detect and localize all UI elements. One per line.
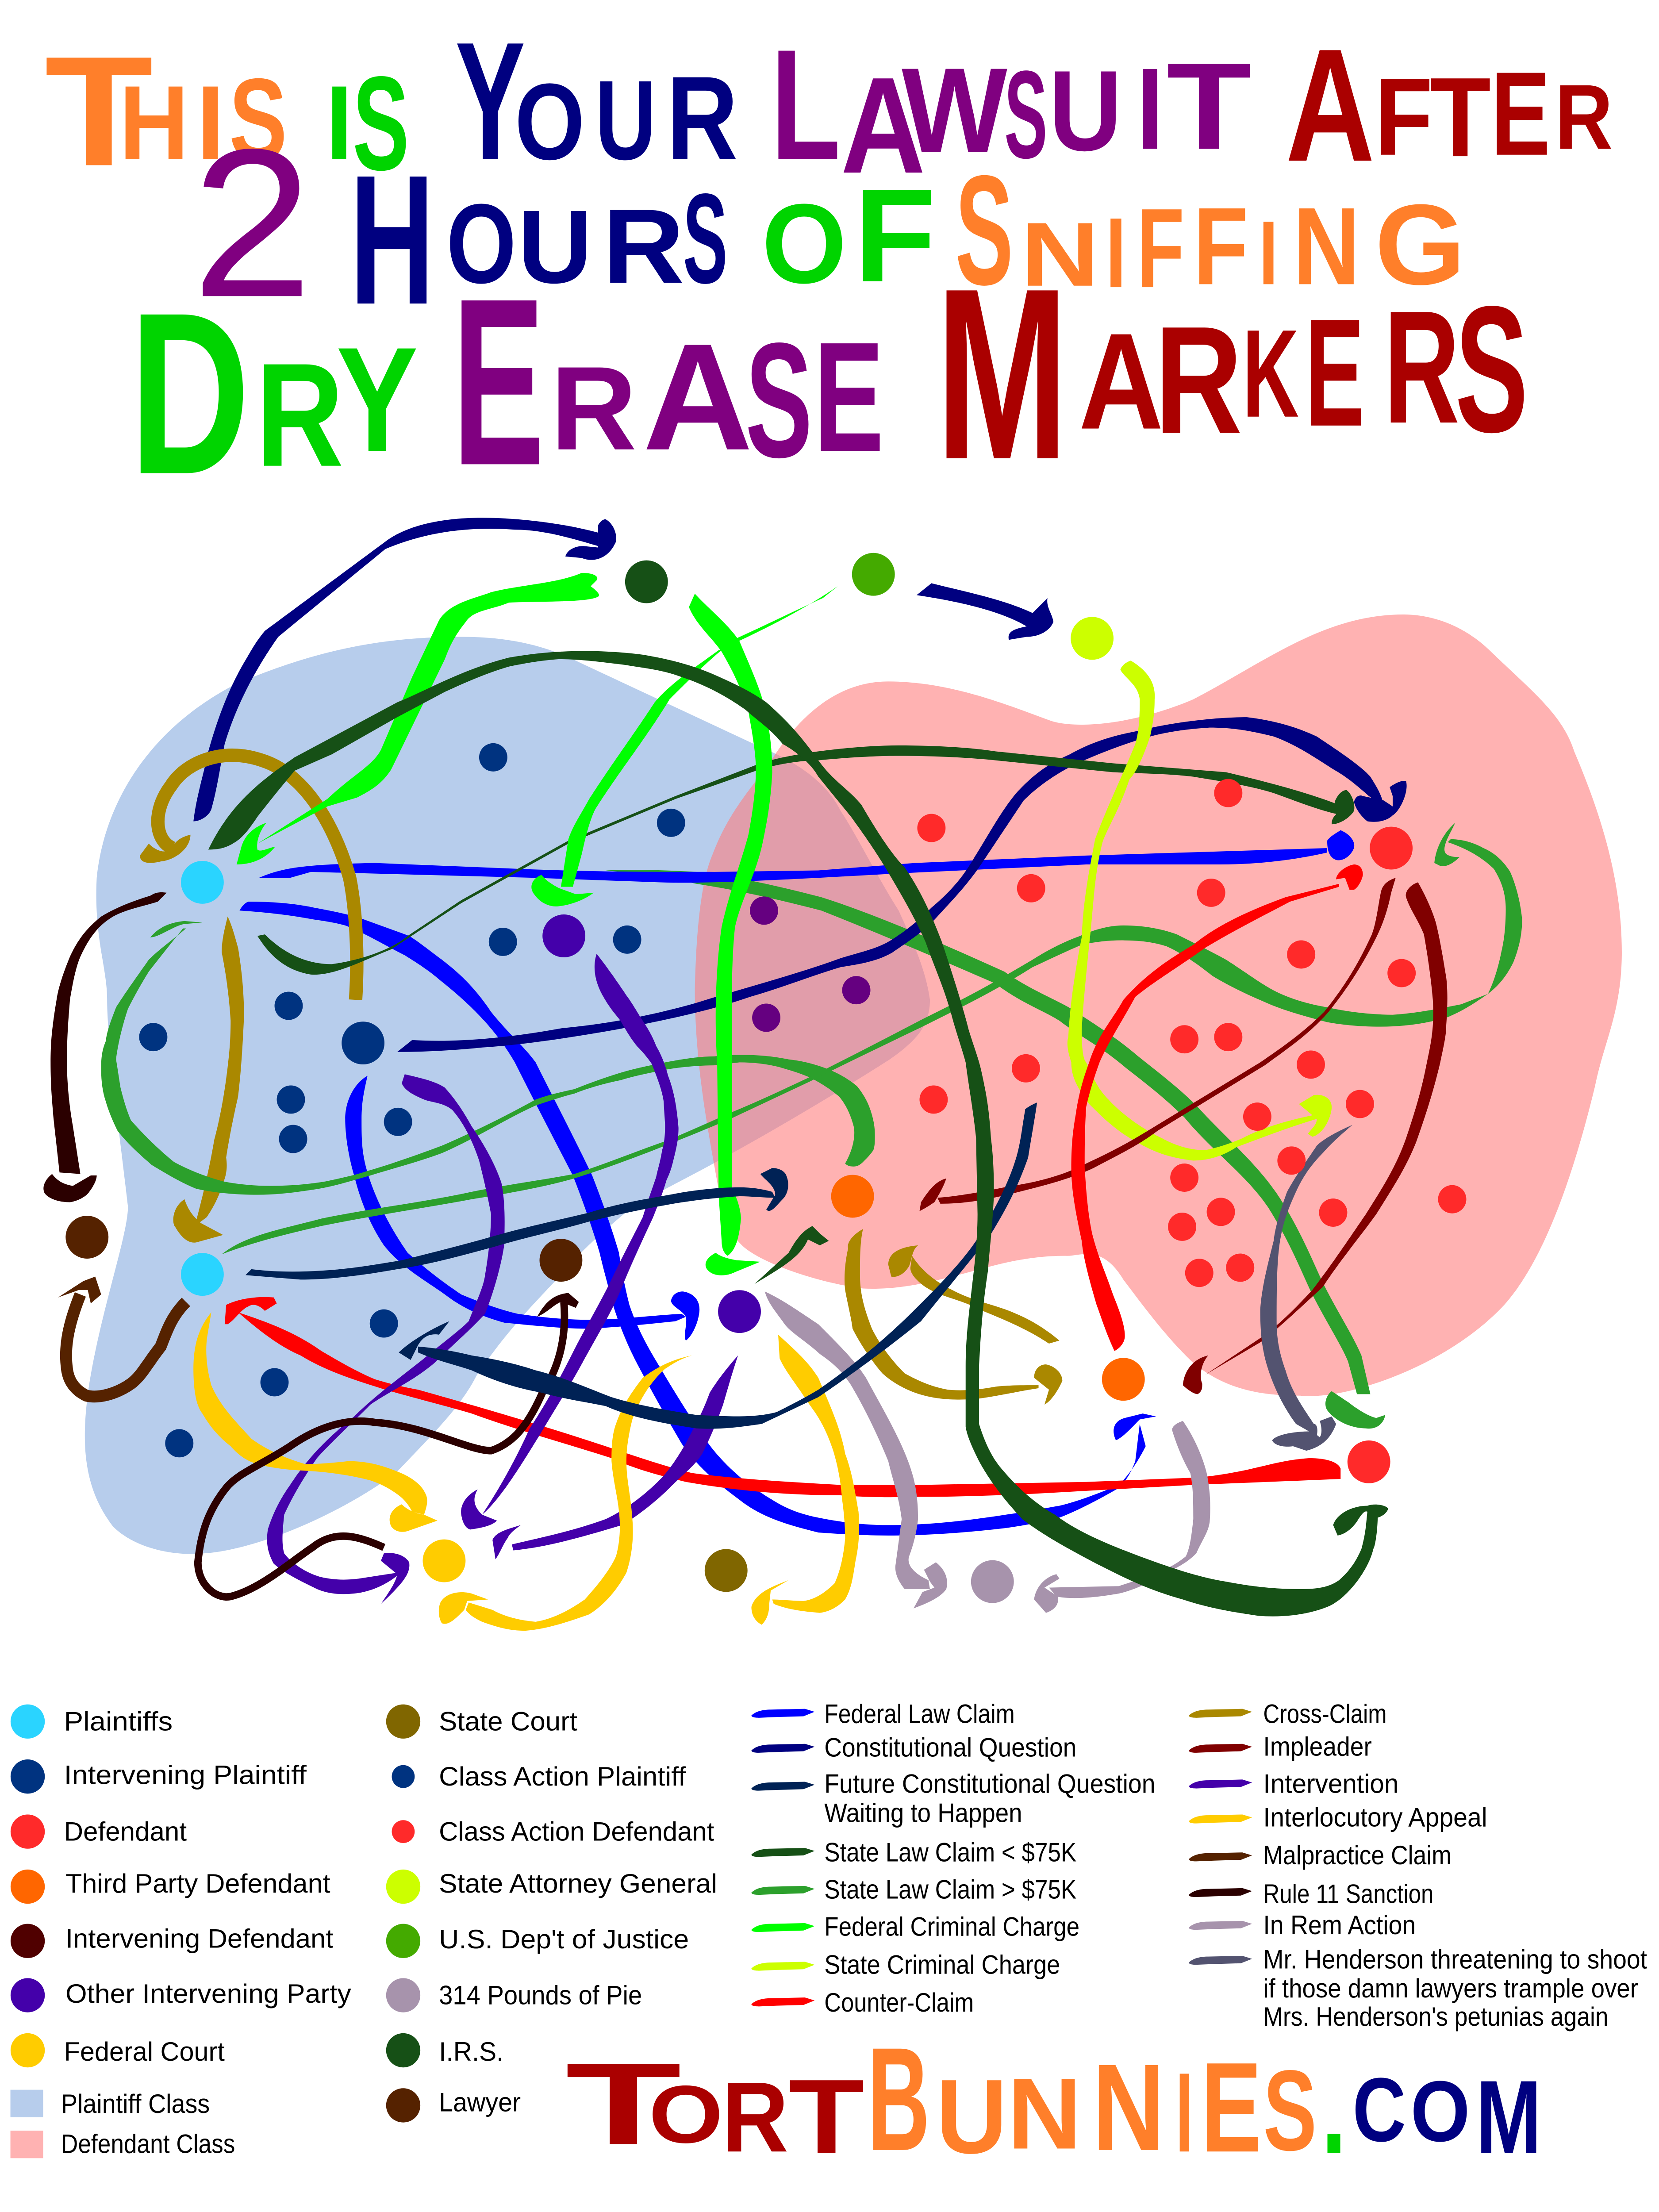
legend item: I.R.S. xyxy=(386,2033,503,2067)
arrow: state criminal charge, attorney general to class defendant xyxy=(1068,661,1332,1160)
legend item: Other Intervening Party: Other Intervening Party xyxy=(65,1978,351,2008)
title word: Lawsuit: I xyxy=(1137,44,1164,173)
arrow: constitutional question, plaintiff to I.R.S. xyxy=(193,518,616,822)
title word: Markers: M xyxy=(936,238,1068,510)
legend item: Defendant: Defendant xyxy=(64,1816,187,1846)
title xyxy=(45,7,1613,522)
logo word: com xyxy=(1352,2059,1541,2175)
arrow: counter-claim, defendant to second plaintiff xyxy=(225,1297,1340,1497)
arrow: federal criminal charge, I.R.S. to other intervening party xyxy=(689,594,772,1275)
legend item: Impleader xyxy=(1189,1732,1372,1762)
arrow: intervention, other intervening party to federal court, lower route xyxy=(492,1356,738,1559)
logo word: Bunnies: U xyxy=(936,2058,1007,2176)
legend item: Malpractice Claim xyxy=(1189,1840,1452,1870)
legend item: Intervening Defendant: Intervening Defendant xyxy=(65,1923,334,1953)
title word: Lawsuit xyxy=(771,16,1251,202)
logo word: Bunnies: E xyxy=(1201,2036,1262,2179)
arrow: future constitutional question, plaintiff to third party xyxy=(246,1168,788,1279)
title word: Dry xyxy=(130,265,418,522)
title word: of xyxy=(762,162,936,310)
title word: Sniffing: I xyxy=(1106,197,1126,308)
arrow: rule 11 sanction, federal court to lawyer xyxy=(198,1293,579,1597)
legend item: State Law Claim over 75K xyxy=(751,1874,1076,1904)
legend item: State Attorney General: State Attorney General xyxy=(439,1868,717,1898)
panel: lawsuit diagram xyxy=(43,518,1622,1631)
dots in the overlap of both classes xyxy=(750,896,870,1032)
logo word: com: C xyxy=(1352,2059,1406,2161)
title word: is: S xyxy=(353,49,409,198)
title word: After: F xyxy=(1375,55,1433,178)
legend item: Interlocutory Appeal: Interlocutory Appeal xyxy=(1263,1802,1487,1832)
legend item: Federal Law Claim xyxy=(751,1699,1015,1729)
arrow: state law claim over 75K, plaintiff to third party defendant xyxy=(101,921,875,1195)
legend item: State Attorney General xyxy=(386,1868,717,1904)
title word: Hours xyxy=(349,137,728,343)
arrow: Mr. Henderson threat, class defendant to defendant xyxy=(1260,1125,1352,1451)
title word: Erase: R xyxy=(550,342,637,475)
legend item: Plaintiff Class: Plaintiff Class xyxy=(61,2089,210,2119)
arrow: interlocutory appeal, plaintiff to federal court xyxy=(193,1312,438,1532)
title word: Your: U xyxy=(595,58,656,184)
title word: Lawsuit: L xyxy=(771,16,841,193)
legend item: 314 Pounds of Pie xyxy=(386,1978,642,2012)
legend item: Plaintiffs xyxy=(11,1705,173,1739)
logo word: Tort: O xyxy=(649,2069,723,2160)
title word: Lawsuit: T xyxy=(1167,37,1251,175)
legend item: Federal Court: Federal Court xyxy=(64,2036,225,2066)
arrow: state law claim over 75K, plaintiff to defendant, running under the blue line xyxy=(606,870,1371,1394)
title word: Lawsuit: U xyxy=(1049,47,1122,175)
legend item: State Law Claim under 75K: State Law Claim < $75K xyxy=(824,1837,1076,1867)
party nodes: named parties xyxy=(65,553,1413,1603)
title word: Your: O xyxy=(515,61,585,183)
title word: Sniffing: N xyxy=(1293,184,1360,307)
title word: is: I xyxy=(326,64,353,182)
title word: Sniffing: F xyxy=(1193,184,1248,307)
title word: Sniffing: F xyxy=(1137,185,1184,311)
title word: After: E xyxy=(1491,47,1550,180)
legend item: Class Action Defendant: Class Action Defendant xyxy=(439,1816,714,1846)
legend item: Federal Law Claim: Federal Law Claim xyxy=(824,1699,1015,1729)
legend item: Cross-Claim xyxy=(1189,1699,1387,1729)
legend item: Lawyer: Lawyer xyxy=(439,2087,521,2117)
logo word: Tort xyxy=(565,2039,864,2176)
title word: Your xyxy=(455,7,738,195)
arrow: future constitutional question, class defendant to class plaintiff xyxy=(399,1102,1037,1429)
title word: Lawsuit: A xyxy=(841,49,926,202)
title word: Erase: E xyxy=(814,309,884,484)
arrow: state law claim under 75K, plaintiff to defendant xyxy=(257,745,1354,975)
title word: Your: R xyxy=(667,52,738,185)
title word: Sniffing xyxy=(955,142,1466,317)
arrowhead: state law claim over 75K at defendant xyxy=(1325,1391,1385,1429)
title word: After: T xyxy=(1430,54,1491,180)
class action plaintiff dots xyxy=(139,743,685,1457)
logo: TortBunnies.com xyxy=(565,2017,1541,2181)
legend item: Federal Criminal Charge: Federal Criminal Charge xyxy=(824,1912,1079,1942)
legend item: Plaintiffs: Plaintiffs xyxy=(64,1706,173,1736)
title word: Dry: Y xyxy=(336,317,418,483)
legend item: State Law Claim over 75K: State Law Claim > $75K xyxy=(824,1874,1076,1904)
title word: Hours: H xyxy=(349,137,434,343)
legend item: Future Constitutional Question Waiting to Happen xyxy=(751,1769,1156,1828)
title word: After: R xyxy=(1555,65,1613,169)
logo word: Bunnies: S xyxy=(1263,2047,1317,2174)
legend item: Federal Criminal Charge xyxy=(751,1912,1079,1942)
legend item: In Rem Action xyxy=(1189,1910,1416,1940)
legend item: Counter-Claim xyxy=(751,1987,974,2017)
class action defendant dots xyxy=(917,779,1466,1287)
arrow: state law claim under 75K, plaintiff over the top to defendant below xyxy=(208,651,1388,1617)
legend item: State Criminal Charge: State Criminal Charge xyxy=(824,1949,1060,1979)
arrow: federal criminal charge, I.R.S. to plaintiff xyxy=(237,573,599,864)
title word: Hours: U xyxy=(518,188,592,305)
legend item: Impleader: Impleader xyxy=(1263,1732,1372,1762)
legend item: I.R.S.: I.R.S. xyxy=(439,2036,503,2066)
arrow: federal criminal charge, justice department to other intervening party xyxy=(531,586,837,906)
title word: Markers: E xyxy=(1305,287,1364,458)
title word: 2: 2 xyxy=(192,105,312,341)
legend item: Federal Court xyxy=(11,2033,225,2067)
logo word: Bunnies: B xyxy=(868,2017,930,2181)
legend item: Intervention: Intervention xyxy=(1263,1769,1398,1799)
region: plaintiff class xyxy=(85,637,930,1554)
legend item: Intervening Plaintiff xyxy=(11,1759,307,1793)
arrow: malpractice claim, plaintiff to lawyer xyxy=(58,1277,186,1397)
title word: Erase: A xyxy=(643,312,753,482)
arrow: rule 11 sanction, plaintiff to lawyer xyxy=(43,892,167,1202)
legend item: Lawyer xyxy=(386,2087,521,2123)
legend item: State Law Claim under 75K xyxy=(751,1837,1076,1867)
logo word: Tort: R xyxy=(722,2061,789,2173)
logo word: Bunnies xyxy=(868,2017,1317,2181)
title word: Dry: D xyxy=(130,265,250,522)
title word: of: O xyxy=(762,181,847,307)
arrow: intervention, other intervening party to federal court xyxy=(461,954,679,1529)
title word: Markers: R xyxy=(1384,277,1459,457)
title word: of: F xyxy=(854,162,936,310)
title word: Erase: E xyxy=(452,249,545,515)
title word: This xyxy=(45,23,287,198)
arrow: intervention, class member to federal court xyxy=(267,1074,505,1604)
legend item: Rule 11 Sanction: Rule 11 Sanction xyxy=(1263,1879,1433,1909)
title word: Hours: S xyxy=(683,167,728,310)
arrow: constitutional question, justice department to attorney general xyxy=(917,583,1053,640)
title word: Markers: A xyxy=(1079,305,1164,458)
region: defendant class xyxy=(695,614,1622,1396)
title word: Lawsuit: S xyxy=(1004,45,1048,184)
arrow: state law claim over 75K, plaintiff two looping to defendant xyxy=(222,823,1522,1254)
logo word: Tort: T xyxy=(565,2039,681,2169)
title word: Sniffing: N xyxy=(1021,204,1099,305)
legend item: U.S. Dep't of Justice: U.S. Dep't of Justice xyxy=(439,1924,689,1954)
legend item: Defendant xyxy=(11,1814,187,1849)
title word: This: T xyxy=(45,23,153,198)
legend item: Intervention xyxy=(1189,1769,1398,1799)
arrow: cross-claim between plaintiffs xyxy=(173,917,244,1243)
title word: After xyxy=(1286,15,1613,195)
title word: Your: Y xyxy=(455,7,525,195)
title word: This: S xyxy=(229,54,287,184)
title word: Sniffing: I xyxy=(1259,202,1278,303)
legend item: Constitutional Question: Constitutional Question xyxy=(824,1732,1076,1762)
panel: arrow legend xyxy=(751,1699,1647,2032)
title word: Dry: R xyxy=(256,333,344,497)
arrow: in rem action, other intervening party to pie xyxy=(765,1291,947,1609)
logo word: Tort: T xyxy=(789,2058,864,2176)
arrow: counter-claim, third party defendant to defendant xyxy=(1071,864,1363,1351)
logo word: com: M xyxy=(1476,2059,1541,2175)
legend item: Defendant Class: Defendant Class xyxy=(61,2129,235,2159)
title word: Sniffing: S xyxy=(955,142,1013,317)
title word: Sniffing: G xyxy=(1375,180,1466,308)
logo word: Bunnies: N xyxy=(1092,2039,1165,2177)
arrow: federal law claim, plaintiff to defendant xyxy=(259,830,1354,883)
legend item: Future Constitutional Question Waiting to Happen: Future Constitutional Question xyxy=(824,1769,1156,1799)
arrow: impleader, defendant to second third party defendant xyxy=(1183,882,1448,1394)
arrow: cross-claim loop at plaintiff xyxy=(140,755,357,1000)
arrow: federal law claim, plaintiff to third party defendant xyxy=(239,902,1156,1536)
arrow: short state law claim near other intervening party xyxy=(754,1226,829,1284)
logo word: com: O xyxy=(1410,2063,1470,2160)
legend item: State Court: State Court xyxy=(439,1706,577,1736)
legend item: 314 Pounds of Pie: 314 Pounds of Pie xyxy=(439,1980,642,2010)
legend item: Mr. Henderson xyxy=(1189,1944,1647,2032)
legend item: Rule 11 Sanction xyxy=(1189,1879,1433,1909)
title word: Erase: S xyxy=(745,309,812,492)
arrow: impleader, defendant to third party defendant xyxy=(919,878,1396,1211)
legend item: Cross-Claim: Cross-Claim xyxy=(1263,1699,1387,1729)
legend item: Mr. Henderson: Mrs. Henderson's petunias again xyxy=(1263,2001,1609,2032)
arrow: federal law claim, intervening plaintiff to other intervening party xyxy=(345,1076,699,1340)
logo word: Bunnies: N xyxy=(1007,2058,1082,2170)
logo word: Bunnies: I xyxy=(1175,2050,1193,2176)
legend item: State Court xyxy=(386,1705,577,1739)
arrow: interlocutory appeal, loop to federal court xyxy=(439,1356,692,1631)
legend item: Third Party Defendant xyxy=(11,1868,330,1904)
title word: This: I xyxy=(196,64,225,182)
legend item: Malpractice Claim: Malpractice Claim xyxy=(1263,1840,1452,1870)
legend item: Third Party Defendant: Third Party Defendant xyxy=(65,1868,330,1898)
title word: Hours: R xyxy=(603,187,684,305)
title word: This: H xyxy=(119,64,189,182)
title word: Markers: S xyxy=(1455,269,1528,470)
title word: Markers: R xyxy=(1155,295,1242,466)
arrow: cross-claim, third party to third party, lower curve xyxy=(845,1229,1062,1405)
arrow: cross-claim, third party to third party, upper curve xyxy=(888,1245,1060,1344)
logo dot: . xyxy=(1321,2038,1347,2181)
legend item: In Rem Action: In Rem Action xyxy=(1263,1910,1416,1940)
title word: Lawsuit: W xyxy=(902,42,1008,177)
panel: node legend xyxy=(11,1705,717,2159)
legend item: Future Constitutional Question Waiting to Happen: Waiting to Happen xyxy=(824,1797,1022,1828)
arrow: interlocutory appeal, to state court xyxy=(751,1335,859,1625)
arrow: in rem action, third party to pie xyxy=(1034,1421,1210,1613)
title word: After: A xyxy=(1286,15,1375,195)
title word: Markers xyxy=(936,238,1528,510)
legend item: Class Action Plaintiff: Class Action Plaintiff xyxy=(439,1761,686,1791)
arrow: constitutional question, intervening plaintiff to defendant xyxy=(397,717,1407,1052)
title word: is xyxy=(326,49,409,198)
title word: Markers: K xyxy=(1242,303,1299,443)
title word: Erase xyxy=(452,249,884,515)
legend item: Counter-Claim: Counter-Claim xyxy=(824,1987,974,2017)
title word: Hours: O xyxy=(446,181,516,307)
legend item: Intervening Plaintiff: Intervening Plaintiff xyxy=(64,1760,307,1790)
